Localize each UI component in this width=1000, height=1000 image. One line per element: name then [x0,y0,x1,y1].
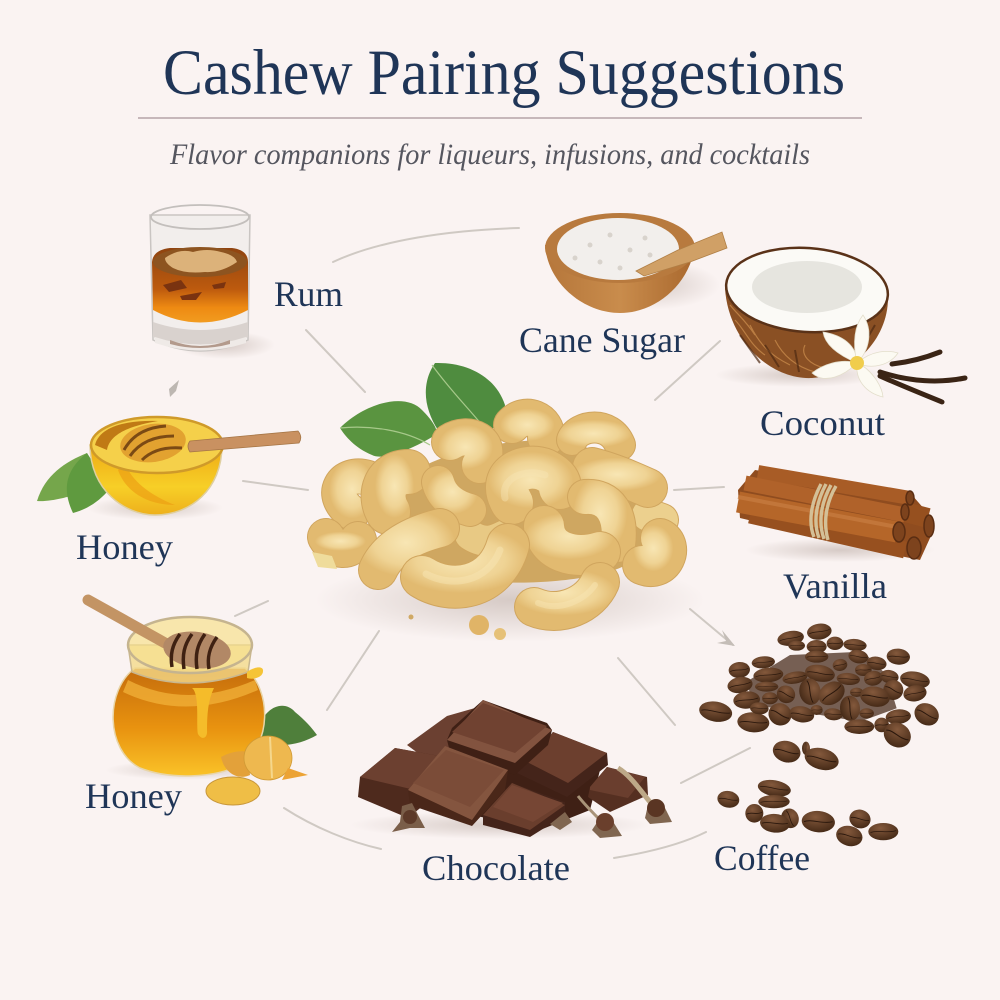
middle cashews [378,467,667,570]
dipper [88,600,165,643]
title: Cashew Pairing Suggestions [163,37,845,109]
subtitle: Flavor companions for liqueurs, infusions, and cocktails [169,138,810,171]
icon: chocolate pieces [350,700,672,839]
label: chocolate: Chocolate [422,848,570,888]
icon: honey bowl with dipper [37,417,301,520]
label: rum: Rum [274,274,343,314]
top center piece [447,700,552,775]
far right piece [588,767,648,812]
chocolate underlay [410,745,600,830]
icon: coffee beans upper cluster [698,622,943,752]
back left piece [407,708,475,762]
crumbs [312,552,506,640]
honey drip [192,688,214,738]
cashews [326,418,667,611]
icon: cane sugar bowl [545,213,727,313]
icon: rum glass [150,205,275,359]
label: coconut: Coconut [760,403,885,443]
icon: cashew pile [312,363,705,642]
glass neck and rim [128,645,252,683]
icon: honey jar with dipper [88,600,317,805]
label: honey (upper): Honey [76,527,173,567]
clove knots [392,768,672,838]
leaf [258,706,317,745]
nut slices [221,751,250,777]
label: cane sugar: Cane Sugar [519,320,685,360]
label: coffee: Coffee [714,838,810,878]
icon: cinnamon sticks [738,470,935,562]
leaves [340,363,505,457]
right piece [517,732,608,797]
front cashews [422,473,600,611]
label: vanilla: Vanilla [783,566,887,606]
back cashews [326,418,662,549]
left piece [358,748,445,818]
front center piece [408,748,508,826]
icon: coffee beans lower cluster [716,738,898,849]
connector arrows [169,228,750,858]
lower piece [483,783,565,837]
label: honey (lower): Honey [85,776,182,816]
icon: coconut with vanilla flower [715,242,965,402]
jar body [113,668,265,776]
